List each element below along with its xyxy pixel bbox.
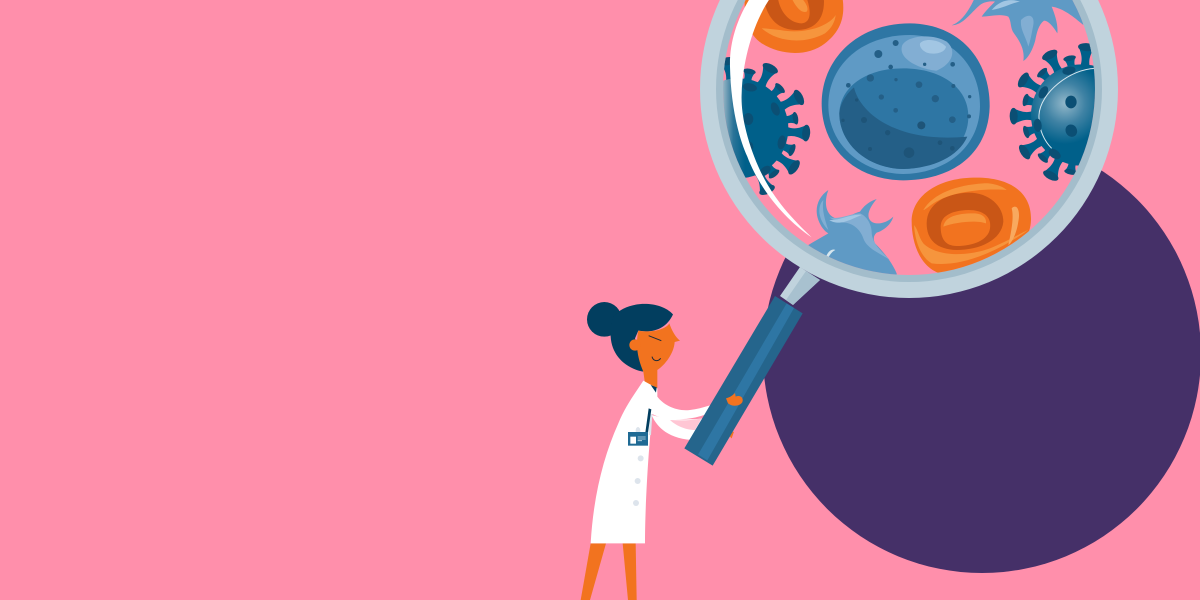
face and neck bbox=[629, 323, 680, 388]
purple circle bbox=[763, 135, 1200, 573]
lens contents bbox=[723, 0, 1095, 274]
magnifying glass lens bbox=[688, 0, 1132, 298]
lab coat bbox=[591, 381, 728, 543]
hair bbox=[587, 302, 673, 372]
coat buttons bbox=[633, 455, 644, 506]
legs bbox=[581, 543, 637, 600]
illustration: scientist examining cells bbox=[580, 0, 1200, 600]
virus: left bbox=[723, 57, 810, 195]
red blood cell: bottom bbox=[912, 178, 1031, 275]
lanyard and ID badge bbox=[628, 408, 652, 446]
macrophage: bottom bbox=[808, 190, 897, 283]
magnifying glass handle neck bbox=[780, 267, 820, 305]
red blood cell: top bbox=[745, 0, 843, 53]
magnifying glass handle bbox=[684, 296, 803, 466]
lens rim bbox=[700, 0, 1118, 298]
hand bbox=[726, 393, 743, 406]
macrophage: top right bbox=[952, 0, 1083, 61]
virus: right bbox=[1010, 43, 1095, 181]
immune cell bbox=[822, 23, 990, 180]
far sleeve bbox=[652, 415, 705, 440]
collar bbox=[651, 385, 657, 393]
lens glare bbox=[730, 0, 812, 237]
scientist figure bbox=[581, 296, 803, 600]
far hand behind handle bbox=[727, 432, 734, 438]
cell dots bbox=[846, 40, 971, 123]
